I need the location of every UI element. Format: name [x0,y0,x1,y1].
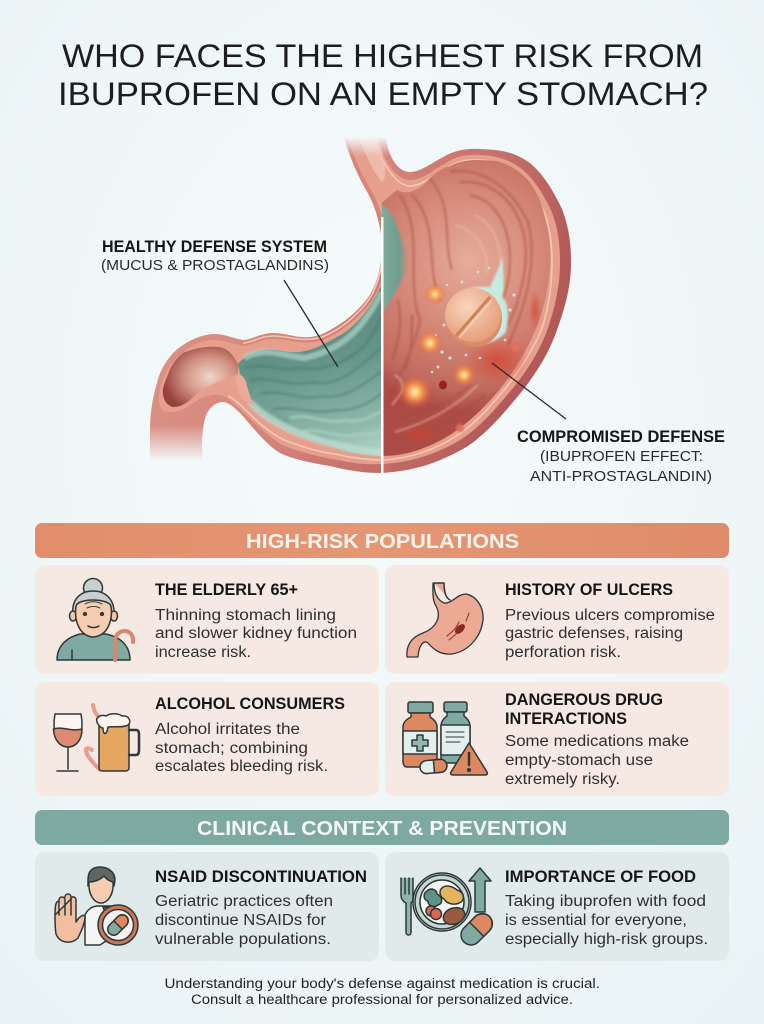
text: nsaid discontinuation: vulnerable populations. [155,931,331,948]
esophagus pale core [358,135,385,182]
inflamed outer lining spots [402,290,541,441]
text: nsaid discontinuation: discontinue NSAIDs for [155,912,326,929]
text: dangerous drug interactions: extremely risky. [505,771,620,788]
stomach outer wall [150,135,571,473]
label: compromised defense [517,428,725,485]
text: alcohol consumers: escalates bleeding risk. [155,758,328,775]
title: IBUPROFEN ON AN EMPTY STOMACH? [58,76,708,112]
panel: dangerous drug interactions [385,682,729,796]
text: history of ulcers: gastric defenses, raising [505,625,683,642]
banner: high-risk populations [35,523,729,558]
fades on tube ends [140,425,210,467]
panel: importance of food [385,852,729,961]
panel: the elderly [35,565,379,674]
inflamed tissue glow [470,340,526,380]
text: the elderly: THE ELDERLY 65+ [155,581,298,599]
pyloric bulb [163,347,238,407]
title: WHO FACES THE HIGHEST RISK FROM [62,38,703,74]
text: history of ulcers: Previous ulcers compromise [505,607,715,624]
text: history of ulcers [505,581,715,661]
text: history of ulcers: HISTORY OF ULCERS [505,581,673,599]
healthy side mucus lumen [238,286,381,457]
text: nsaid discontinuation: Geriatric practices often [155,893,333,910]
text: dangerous drug interactions: INTERACTIONS [505,710,627,728]
banner: clinical context and prevention [35,810,729,845]
icon: fork, plate, arrow and capsule [401,868,497,949]
leader line: healthy [284,280,338,367]
text: dangerous drug interactions: Some medications make [505,733,689,750]
icon: doctor with stop hand and crossed pill [55,867,138,945]
banner: clinical context and prevention: CLINICAL CONTEXT & PREVENTION [197,818,567,840]
text: alcohol consumers: ALCOHOL CONSUMERS [155,695,345,713]
text: alcohol consumers: stomach; combining [155,740,308,757]
label: healthy defense system [101,238,329,274]
text: nsaid discontinuation: NSAID DISCONTINUATION [155,868,367,886]
pale wall highlight lines [228,136,552,460]
text: importance of food: especially high-risk groups. [505,931,708,948]
label: healthy defense system: HEALTHY DEFENSE SYSTEM [102,238,327,256]
title [58,38,708,112]
ulcer hot spots [398,283,476,409]
footer note: Understanding your body's defense against medication is crucial. [164,976,600,991]
text: dangerous drug interactions [505,691,689,788]
text: importance of food: IMPORTANCE OF FOOD [505,868,696,886]
icon: stomach with ulcer [407,583,483,657]
stomach inner lining [159,135,560,464]
footer note [164,976,600,1007]
pyloric valve [236,375,254,406]
text: importance of food [505,868,708,948]
teal remnant right of divider [380,204,408,312]
label: compromised defense: ANTI-PROSTAGLANDIN) [530,468,712,485]
panel: alcohol consumers [35,682,379,796]
label: compromised defense: (IBUPROFEN EFFECT: [540,448,703,465]
text: dangerous drug interactions: empty-stomach use [505,752,653,769]
text: importance of food: is essential for everyone, [505,912,687,929]
text: alcohol consumers [155,695,345,775]
footer note: Consult a healthcare professional for personalized advice. [191,992,573,1007]
tablet and residue [431,255,516,373]
icon: medicine bottles and warning [403,702,487,775]
text: the elderly [155,581,357,661]
centre divider line [381,217,384,473]
text: the elderly: and slower kidney function [155,625,357,642]
compromised side lumen [380,160,550,456]
text: nsaid discontinuation [155,868,367,948]
panel: history of ulcers [385,565,729,674]
text: the elderly: Thinning stomach lining [155,607,336,624]
banner: high-risk populations: HIGH-RISK POPULATIONS [246,531,519,553]
text: alcohol consumers: Alcohol irritates the [155,721,300,738]
stomach cross-section illustration [140,132,571,473]
icon: wine glass and beer mug [54,705,139,771]
panel: nsaid discontinuation [35,852,379,961]
label: compromised defense: COMPROMISED DEFENSE [517,428,725,446]
icon: elderly person with cane [57,578,133,660]
text: importance of food: Taking ibuprofen with food [505,893,706,910]
leader line: compromised [492,363,566,419]
text: history of ulcers: perforation risk. [505,644,621,661]
text: the elderly: increase risk. [155,644,251,661]
text: dangerous drug interactions: DANGEROUS DRUG [505,691,663,709]
label: healthy defense system: (MUCUS & PROSTAGLANDINS) [101,257,329,274]
